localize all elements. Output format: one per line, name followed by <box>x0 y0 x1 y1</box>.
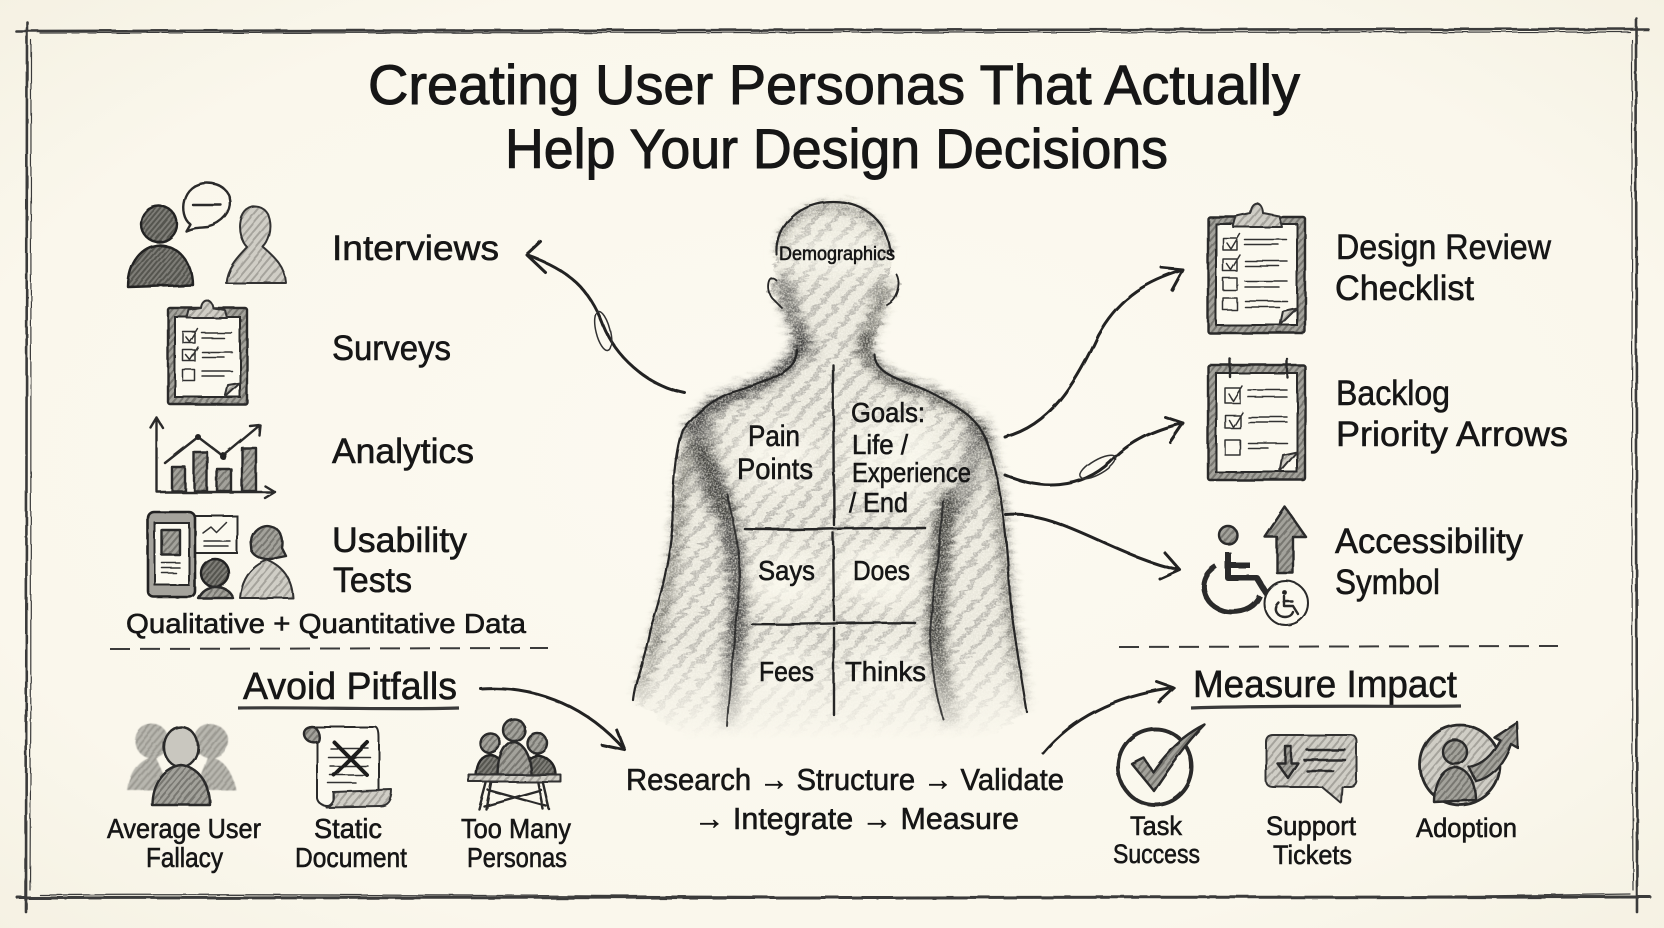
label: Goals: Experience <box>852 457 971 488</box>
arrow: figure to research <box>527 242 685 393</box>
icon: static document scroll <box>304 727 392 807</box>
title <box>368 53 1300 180</box>
label: Support Tickets: Tickets <box>1273 840 1352 870</box>
panel: research methods <box>126 183 526 639</box>
label: Support Tickets <box>1266 811 1356 870</box>
heading: Avoid Pitfalls: Avoid Pitfalls <box>243 666 457 708</box>
icon: accessibility symbol <box>1203 507 1308 625</box>
label: Average User Fallacy <box>107 813 261 873</box>
icon: analytics chart <box>151 418 275 498</box>
label: Too Many Personas: Too Many <box>461 813 571 844</box>
icon: average user <box>127 724 236 805</box>
label: Task Success: Task <box>1130 811 1182 841</box>
label: Demographics: Demographics <box>779 244 895 265</box>
label: Pain Points: Points <box>737 453 813 486</box>
icon: surveys clipboard <box>168 300 247 404</box>
label: Support Tickets: Support <box>1266 811 1356 841</box>
icon: too many personas <box>469 719 561 809</box>
label: Does: Does <box>853 555 910 586</box>
icon: task success <box>1118 725 1205 805</box>
arrow: figure to accessibility <box>1006 515 1180 579</box>
label: Static Document: Static <box>314 813 382 844</box>
label: Analytics: Analytics <box>332 432 474 471</box>
label: Backlog Priority Arrows: Backlog <box>1336 374 1450 413</box>
process flow text: → Integrate → Measure <box>694 801 1019 836</box>
title: Help Your Design Decisions <box>505 117 1168 180</box>
label: Usability Tests: Tests <box>333 561 412 600</box>
panel: measure impact <box>1113 664 1518 870</box>
label: Pain Points: Pain <box>748 420 800 453</box>
label: Average User Fallacy: Average User <box>107 813 261 844</box>
label: Thinks: Thinks <box>845 656 926 687</box>
icon: backlog clipboard <box>1208 359 1305 480</box>
label: Adoption: Adoption <box>1416 813 1517 843</box>
caption: data types: Qualitative + Quantitative Data <box>126 608 526 639</box>
panel: design outputs <box>1203 203 1568 625</box>
icon: usability tests <box>148 512 293 598</box>
label: Feels: Fees <box>759 656 814 687</box>
icon: design review checklist <box>1208 203 1305 333</box>
icon: interviews <box>128 183 286 287</box>
process flow text: Research → Structure → Validate <box>626 762 1064 797</box>
process flow text <box>626 762 1064 836</box>
arrow: pitfalls to process <box>481 689 625 750</box>
label: Static Document: Document <box>295 842 407 873</box>
label: Says: Says <box>758 555 815 586</box>
icon: support tickets <box>1266 735 1357 803</box>
label: Goals <box>849 397 971 518</box>
label: Task Success: Success <box>1113 839 1200 869</box>
label: Design Review Checklist: Design Review <box>1336 228 1552 267</box>
panel: persona figure <box>633 202 1027 740</box>
label: Backlog Priority Arrows: Priority Arrows <box>1336 415 1568 454</box>
arrow: process to measure impact <box>1043 682 1174 753</box>
label: Too Many Personas: Personas <box>467 842 567 873</box>
icon: adoption <box>1420 722 1518 805</box>
label: Backlog Priority Arrows <box>1336 374 1568 454</box>
label: Static Document <box>295 813 407 873</box>
label: Accessibility Symbol: Symbol <box>1335 563 1440 602</box>
label: Task Success <box>1113 811 1200 869</box>
heading: Measure Impact: Measure Impact <box>1193 664 1457 706</box>
label: Pain Points <box>737 420 813 486</box>
label: Average User Fallacy: Fallacy <box>146 842 223 873</box>
arrow: figure to backlog <box>1005 417 1183 485</box>
label: Goals: Goals: <box>851 397 925 428</box>
label: Usability Tests <box>332 521 468 600</box>
label: Goals: Life / <box>852 429 908 460</box>
label: Too Many Personas <box>461 813 571 873</box>
figure silhouette with shading <box>633 202 1027 740</box>
label: Design Review Checklist: Checklist <box>1335 269 1474 308</box>
label: Usability Tests: Usability <box>332 521 468 560</box>
label: Goals: / End <box>849 487 908 518</box>
label: Accessibility Symbol <box>1335 522 1523 602</box>
label: Accessibility Symbol: Accessibility <box>1335 522 1523 561</box>
panel: avoid pitfalls <box>107 666 571 873</box>
label: Surveys: Surveys <box>332 329 451 368</box>
title: Creating User Personas That Actually <box>368 53 1300 116</box>
label: Interviews: Interviews <box>332 229 499 268</box>
arrow: figure to design review <box>1005 268 1183 437</box>
label: Design Review Checklist <box>1335 228 1552 308</box>
